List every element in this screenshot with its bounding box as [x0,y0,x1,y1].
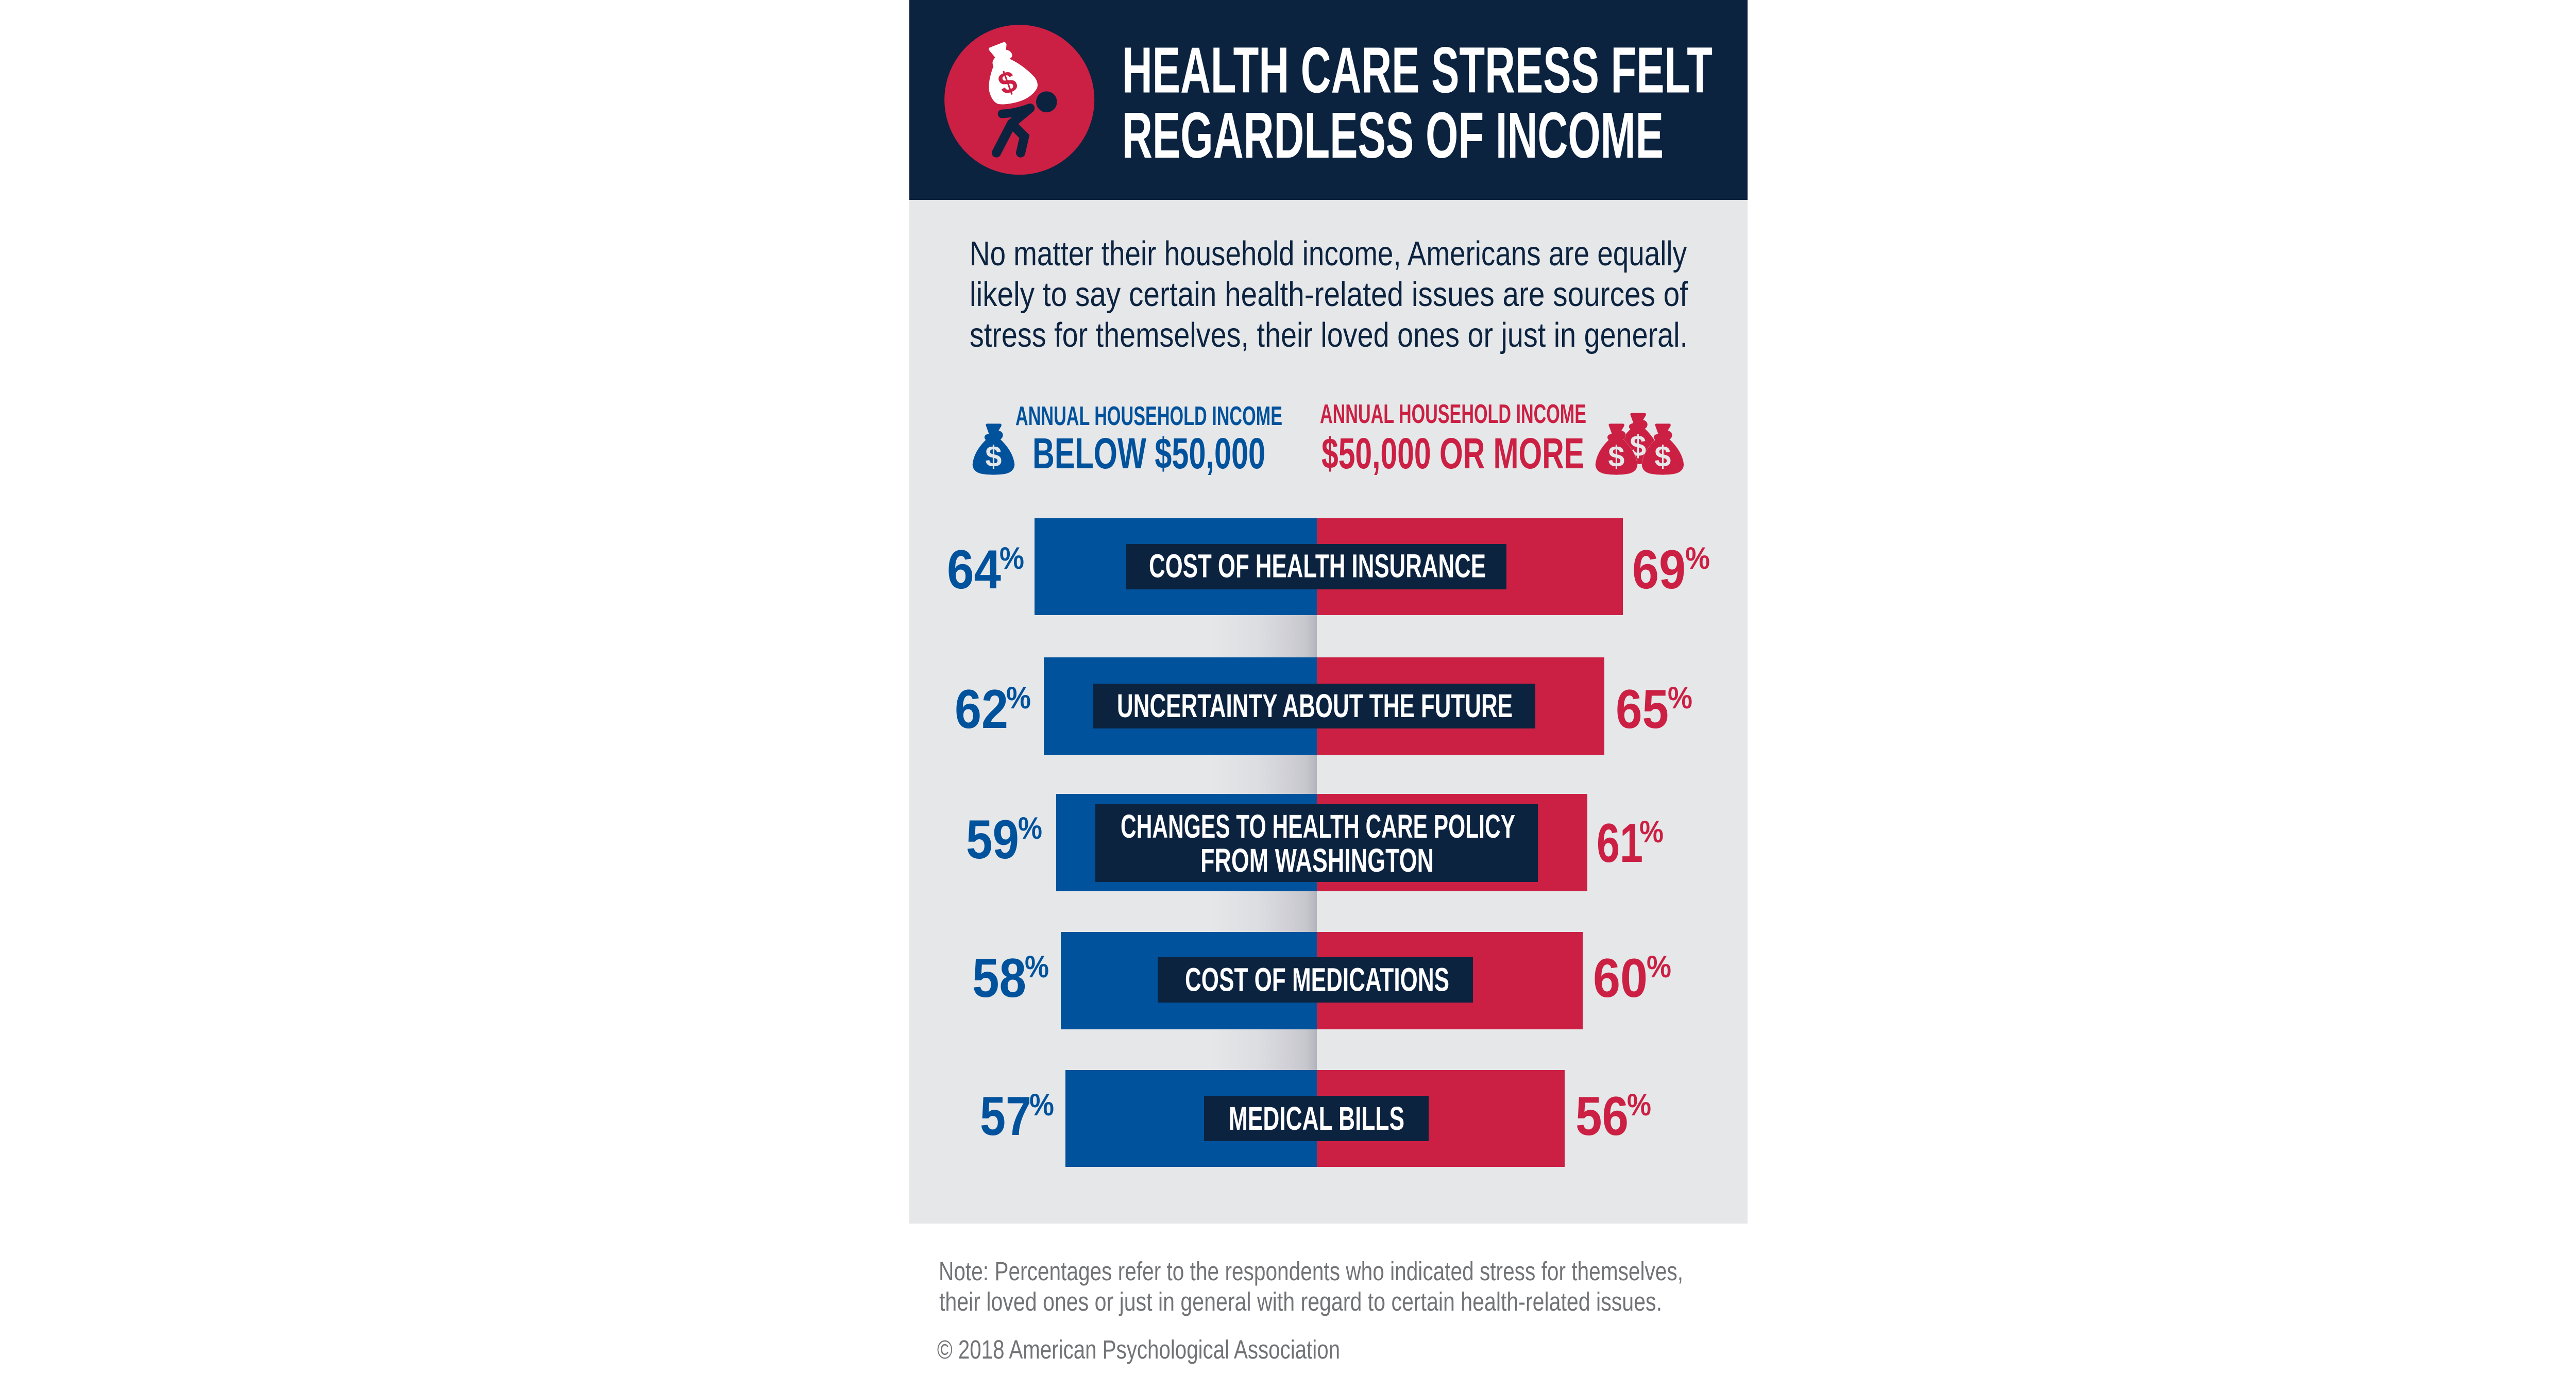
row: changes to health care policy: 59 [966,808,1019,870]
row: changes to health care policy: CHANGES TO HEALTH CARE POLICY [1121,808,1515,845]
row: cost of health insurance: 64 [947,538,1001,600]
icon: three red money bags: $ [1654,440,1671,473]
panel: header [909,0,1748,200]
icon: blue money bag: $ [985,440,1002,473]
row: changes to health care policy [966,794,1664,891]
icon: person carrying money bag: $ [994,63,1022,101]
row: cost of medications: 60 [1593,947,1648,1009]
row: changes to health care policy: FROM WASHINGTON [1200,842,1434,879]
legend label blue: BELOW $50,000 [1032,429,1265,478]
row: medical bills: MEDICAL BILLS [1229,1100,1404,1137]
legend label red: ANNUAL HOUSEHOLD INCOME [1320,399,1586,429]
row: uncertainty about the future [955,657,1692,755]
legend label blue: ANNUAL HOUSEHOLD INCOME [1015,401,1282,431]
row: medical bills: 56 [1575,1085,1629,1147]
row: cost of health insurance: 69 [1632,538,1686,600]
legend label red: $50,000 OR MORE [1321,429,1584,478]
row: cost of health insurance: COST OF HEALTH INSURANCE [1149,547,1486,584]
row: uncertainty about the future: % [1006,681,1031,715]
row: cost of medications: % [1647,949,1671,984]
row: uncertainty about the future: UNCERTAINTY ABOUT THE FUTURE [1117,687,1513,724]
row: cost of health insurance: % [999,541,1024,575]
title: HEALTH CARE STRESS FELT [1122,34,1713,106]
legend label blue [1015,401,1282,478]
row: changes to health care policy: 61 [1597,812,1643,874]
icon: blue money bag [973,423,1014,475]
row: uncertainty about the future: % [1668,681,1692,715]
row: medical bills: % [1029,1088,1054,1122]
row: uncertainty about the future: 62 [955,678,1008,740]
icon: person carrying money bag [944,25,1094,175]
row: medical bills: % [1627,1088,1651,1122]
intro text [970,234,1688,354]
row: medical bills [980,1070,1651,1167]
intro text: likely to say certain health-related issues are sources of [970,275,1688,314]
legend: $50,000 or more [1320,399,1684,478]
footnote [937,1257,1683,1364]
row: cost of medications: 58 [972,947,1026,1009]
panel: gray content background [909,200,1748,1224]
legend: below $50,000 [973,401,1282,478]
row: changes to health care policy: % [1639,815,1664,849]
row: uncertainty about the future: 65 [1616,678,1669,740]
footnote: their loved ones or just in general with regard to certain health-related issues. [939,1287,1662,1316]
title [1122,34,1713,172]
row: changes to health care policy: % [1018,811,1042,845]
title: REGARDLESS OF INCOME [1122,99,1664,172]
row: medical bills: 57 [980,1085,1031,1147]
icon: three red money bags: $ [1608,440,1624,473]
row: cost of medications [972,932,1671,1029]
legend label red [1320,399,1586,478]
icon: three red money bags [1596,413,1684,475]
row: cost of medications: COST OF MEDICATIONS [1185,961,1449,998]
chart: diverging bars [947,518,1710,1167]
footnote: Note: Percentages refer to the respondents who indicated stress for themselves, [939,1257,1683,1286]
icon: three red money bags: $ [1630,430,1646,463]
copyright: © 2018 American Psychological Association [937,1335,1340,1364]
intro text: stress for themselves, their loved ones or just in general. [970,316,1688,354]
intro text: No matter their household income, Americans are equally [970,234,1687,273]
row: cost of health insurance: % [1685,541,1710,575]
row: cost of medications: % [1025,949,1049,984]
row: cost of health insurance [947,518,1710,615]
